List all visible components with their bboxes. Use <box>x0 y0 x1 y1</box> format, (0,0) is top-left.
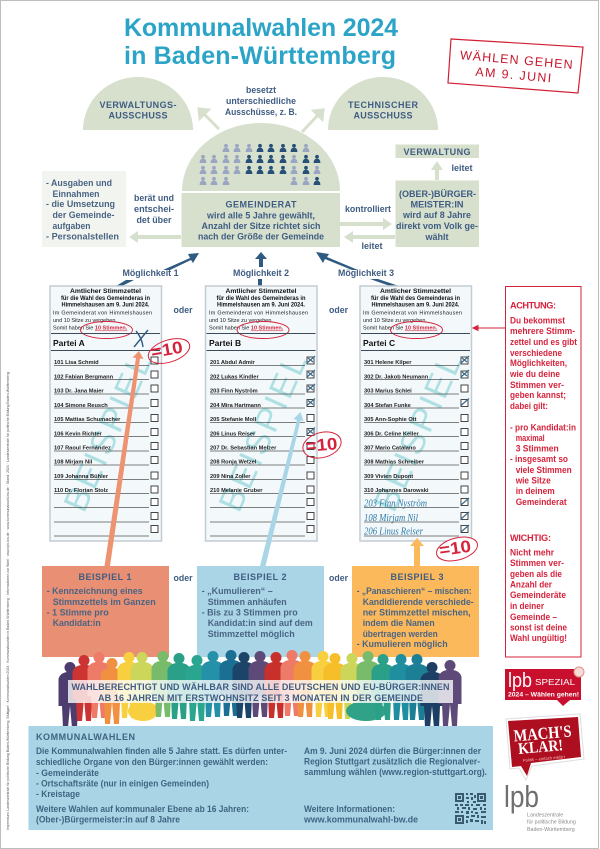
title: in Baden-Württemberg <box>124 42 396 70</box>
ballot: Partei C: Im Gemeinderat von Himmelshausen <box>363 310 462 316</box>
ballot: Partei C: 108 Mirjam Nil <box>364 513 418 524</box>
oder labels: oder <box>174 305 193 315</box>
ballot: Partei A: und 10 Sitze zu vergeben. <box>53 318 117 324</box>
dome: Verwaltungsausschuss: AUSSCHUSS <box>108 110 168 120</box>
panel: Aufgaben: - Personalstellen <box>46 232 119 242</box>
panel: Kommunalwahlen Info: Am 9. Juni 2024 dürfen die Bürger:innen der <box>304 746 481 756</box>
ballot: Partei C: für die Wahl des Gemeinderas in <box>371 295 460 302</box>
text: berät und entscheidet über: berät und <box>134 193 174 203</box>
ballot: Partei B: für die Wahl des Gemeinderas in <box>216 295 306 302</box>
ballot: Partei B: Himmelshausen am 9. Juni 2024. <box>217 302 305 308</box>
label: Möglichkeit 2: Möglichkeit 2 <box>233 268 289 278</box>
ballot: Partei C: 306 Dr. Celine Keller <box>364 432 419 438</box>
arrow: to Verwaltung <box>431 161 443 180</box>
ballot: Partei C: Partei C <box>363 338 395 348</box>
ballot: Partei B: 205 Stefanie Moll <box>210 417 257 423</box>
panel: Achtung Hinweis: ACHTUNG: <box>510 300 556 310</box>
arrow: to Verwaltungsausschuss <box>199 109 219 129</box>
text: besetzt unterschiedliche Ausschüsse: unterschiedliche <box>226 96 296 106</box>
panel: Kommunalwahlen Info <box>28 726 493 830</box>
text: besetzt unterschiedliche Ausschüsse: Ausschüsse, z. B. <box>225 107 297 117</box>
watermark: Beispiel: BEISPIEL <box>212 348 315 517</box>
panel: Achtung Hinweis: in deinem <box>516 486 555 496</box>
oder labels: oder <box>329 305 348 315</box>
panel: Kommunalwahlen Info: www.kommunalwahl-bw.de <box>303 814 418 824</box>
arrow: Möglichkeit 2 <box>255 252 267 267</box>
logo: lpb Landeszentrale: Baden-Württemberg <box>527 827 575 833</box>
panel: Achtung Hinweis: - pro Kandidat:in <box>510 422 576 432</box>
dome: Verwaltungsausschuss <box>83 77 193 130</box>
arrow: Beispiel 1 <box>104 351 144 566</box>
panel: Beispiel 2: BEISPIEL 2 <box>234 572 286 582</box>
arrow: Beispiel 2 <box>260 412 304 566</box>
panel: Bürgermeister: direkt vom Volk ge- <box>396 221 478 231</box>
logo: lpb Landeszentrale <box>504 779 576 833</box>
stamp: Wählen gehen am 9. Juni: AM 9. JUNI <box>475 65 552 85</box>
watermark: Beispiel: BEISPIEL <box>57 348 160 517</box>
panel: Beispiel 1: - 1 Stimme pro <box>47 608 109 618</box>
panel: Beispiel 3 <box>352 566 479 657</box>
arrow: leitet <box>344 231 395 243</box>
ballot: Partei A: 103 Dr. Jana Maier <box>54 388 104 394</box>
panel: Achtung Hinweis: maximal <box>516 433 545 443</box>
panel: Achtung Hinweis: Möglichkeiten, <box>510 358 567 368</box>
ballot: Partei B: und 10 Sitze zu vergeben. <box>209 318 273 324</box>
ballot: Partei A: Im Gemeinderat von Himmelshausen <box>53 310 152 316</box>
panel: Beispiel 3: indem die Namen <box>363 618 435 628</box>
logo: lpb Landeszentrale: Landeszentrale <box>527 812 563 818</box>
logo: Mach's klar: KLAR! <box>517 737 564 758</box>
panel: Gemeinderat <box>182 123 340 247</box>
arrow: Beispiel 3 <box>410 538 424 566</box>
ballot: Partei B: Amtlicher Stimmzettel <box>226 288 297 295</box>
panel: Beispiel 3: - „Panaschieren“ – mischen: <box>357 586 472 596</box>
ballot: Partei B: 210 Melanie Gruber <box>210 488 263 494</box>
logo: Mach's klar: Politik – einfach erklärt <box>523 754 566 763</box>
panel: Verwaltung <box>396 144 479 158</box>
panel: Aufgaben: der Gemeinde- <box>52 210 114 220</box>
panel: Kommunalwahlen Info: - Gemeinderäte <box>36 768 99 778</box>
callout: =10 Partei A <box>145 334 193 368</box>
logo: Mach's klar: MACH'S <box>513 722 572 746</box>
panel: Kommunalwahlen Info: - Kreistage <box>36 789 80 799</box>
panel: Gemeinderat: Anzahl der Sitze richtet sich <box>202 221 321 231</box>
logo: lpb Landeszentrale: für politische Bildung <box>527 820 576 826</box>
panel: Beispiel 1: BEISPIEL 1 <box>78 572 132 582</box>
banner: Wahlberechtigt: AB 16 JAHREN MIT ERSTWOHNSITZ SEIT 3 MONATEN IN DER GEMEINDE <box>98 693 423 703</box>
ballot: Partei A <box>50 286 162 541</box>
label: Möglichkeit 1: Möglichkeit 1 <box>122 268 178 278</box>
ballot: Partei B: Im Gemeinderat von Himmelshausen <box>209 310 308 316</box>
panel: Beispiel 2: - Bis zu 3 Stimmen pro <box>202 608 298 618</box>
ballot: Partei A: 105 Mattias Schumacher <box>54 417 121 423</box>
ballot: Partei C: 309 Vivien Dupont <box>364 474 413 480</box>
panel: Achtung Hinweis: Du bekommst <box>510 316 565 326</box>
arrow: Hinweis to ballot <box>473 326 505 330</box>
title: Kommunalwahlen 2024 <box>124 14 398 42</box>
panel: Achtung Hinweis: Gemeinderat <box>516 497 567 507</box>
ballot: Partei A: 102 Fabian Bergmann <box>54 374 114 380</box>
panel: Achtung Hinweis: geben als die <box>510 569 562 579</box>
ballot: Partei B: 209 Nina Zoller <box>210 474 251 480</box>
dome: Verwaltungsausschuss: VERWALTUNGS- <box>100 100 176 110</box>
panel: Bürgermeister: wird auf 8 Jahre <box>402 210 471 220</box>
panel: Achtung Hinweis: Anzahl der <box>510 580 552 590</box>
ballot: Partei B: 203 Finn Nyström <box>210 388 258 394</box>
ballot: Partei C: 305 Ann-Sophie Ott <box>364 417 417 423</box>
panel: Beispiel 2: Stimmzettel möglich <box>208 629 295 639</box>
panel: Kommunalwahlen Info: schiedliche Organe von den Bürger:innen gewählt werden: <box>36 757 268 767</box>
label: Möglichkeit 3: Möglichkeit 3 <box>338 268 394 278</box>
label: leitet: leitet <box>452 163 472 173</box>
ballot: Partei C: 301 Helene Kilper <box>364 360 412 366</box>
callout: =10 Partei C <box>434 533 480 565</box>
panel: Beispiel 3: ner Stimmzettel mischen, <box>363 608 471 618</box>
panel: Kommunalwahlen Info: - Ortschaftsräte (nur in einigen Gemeinden) <box>36 778 209 788</box>
panel: Achtung Hinweis: viele Stimmen <box>516 465 572 475</box>
panel: Achtung Hinweis: wie du deine <box>509 369 560 379</box>
stamp: Wählen gehen am 9. Juni <box>448 39 583 93</box>
ballot: Partei A: 110 Dr. Florian Stolz <box>54 488 108 494</box>
logo: lpb Spezial <box>505 667 584 706</box>
panel: Achtung Hinweis: zettel und es gibt <box>510 337 577 347</box>
people silhouettes <box>58 650 462 728</box>
panel: Aufgaben: - Ausgaben und <box>46 178 112 188</box>
panel: Achtung Hinweis: verschiedene <box>510 348 562 358</box>
oder labels: oder <box>329 573 348 583</box>
ballot: Partei A: Somit haben Sie 10 Stimmen. <box>53 326 128 332</box>
ballot: Partei B: 201 Abdul Admir <box>210 360 256 366</box>
panel: Beispiel 3: Kandidierende verschiede- <box>363 597 474 607</box>
panel: Beispiel 3: - Kumulieren möglich <box>357 639 448 649</box>
ballot: Partei C: 303 Marius Schlei <box>364 388 412 394</box>
connectors to ballots <box>116 279 399 286</box>
panel: Bürgermeister <box>396 180 479 247</box>
title <box>124 14 398 70</box>
ballot: Partei A: 104 Simone Reusch <box>54 403 108 409</box>
panel: Aufgaben: Einnahmen <box>52 189 100 199</box>
callout: =10 Partei B <box>300 428 344 462</box>
panel: Gemeinderat: GEMEINDERAT <box>226 200 297 210</box>
panel: Achtung Hinweis: Stimmen ver- <box>510 380 564 390</box>
panel: Achtung Hinweis: - insgesamt so <box>510 454 568 464</box>
dome: Technischer Ausschuss <box>328 77 438 130</box>
panel: Beispiel 2 <box>197 566 324 657</box>
text: berät und entscheidet über <box>134 193 174 225</box>
banner: Wahlberechtigt <box>68 680 453 703</box>
panel: Achtung Hinweis: Gemeinde – <box>510 612 557 622</box>
ballot: Partei A: Partei A <box>53 338 85 348</box>
panel: Achtung Hinweis: dabei gilt: <box>510 401 548 411</box>
panel: Achtung Hinweis: Stimmen ver- <box>510 558 564 568</box>
panel: Bürgermeister: wählt <box>425 232 448 242</box>
oder labels: oder <box>174 573 193 583</box>
panel: Beispiel 3: BEISPIEL 3 <box>390 572 444 582</box>
QR code <box>455 793 486 824</box>
banner: Wahlberechtigt: WAHLBERECHTIGT UND WÄHLBAR SIND ALLE DEUTSCHEN UND EU-BÜRGER:INNEN <box>72 682 450 692</box>
seat icons <box>200 144 320 185</box>
ballot: Partei C: 203 Finn Nyström <box>364 498 427 510</box>
ballot: Partei C <box>360 286 472 541</box>
panel: Achtung Hinweis <box>506 286 581 657</box>
ballot: Partei C: Amtlicher Stimmzettel <box>380 288 451 295</box>
ballot: Partei A: 108 Mirjam Nil <box>54 460 93 466</box>
ballot: Partei C: 206 Linus Reiser <box>364 526 423 538</box>
ballot: Partei B: 202 Lukas Kindler <box>210 374 259 380</box>
panel: Beispiel 1: Stimmzettels im Ganzen <box>53 597 156 607</box>
panel: Kommunalwahlen Info: KOMMUNALWAHLEN <box>36 732 135 742</box>
ballot: Partei C: 307 Mario Catalano <box>364 446 416 452</box>
panel: Achtung Hinweis: Wahl ungültig! <box>510 633 567 643</box>
panel: Aufgaben: - die Umsetzung <box>46 199 115 209</box>
arrow: Möglichkeit 1 <box>163 253 199 270</box>
panel: Beispiel 2: - „Kumulieren“ – <box>202 586 273 596</box>
panel: Kommunalwahlen Info: Weitere Wahlen auf kommunaler Ebene ab 16 Jahren: <box>36 804 249 814</box>
text: besetzt unterschiedliche Ausschüsse: besetzt <box>246 85 276 95</box>
oder labels <box>174 305 348 583</box>
text: besetzt unterschiedliche Ausschüsse <box>225 85 297 117</box>
watermark: Beispiel: BEISPIEL <box>367 348 470 517</box>
ballot: Partei A: für die Wahl des Gemeinderas in <box>61 295 150 302</box>
text: berät und entscheidet über: entschei- <box>134 204 174 214</box>
callout: =10 Partei C: =10 <box>438 537 472 560</box>
panel: Beispiel 3: übertragen werden <box>363 629 438 639</box>
ballot: Partei B: 208 Ronja Wetzel <box>210 460 257 466</box>
panel: Achtung Hinweis: geben kannst; <box>510 390 566 400</box>
ballot: Partei C: 302 Dr. Jakob Neumann <box>364 374 429 380</box>
ballot: Partei A: Himmelshausen am 9. Juni 2024. <box>62 302 150 308</box>
panel: Verwaltung: VERWALTUNG <box>404 147 470 157</box>
arrow: kontrolliert <box>340 218 392 230</box>
label: kontrolliert: kontrolliert <box>345 204 391 214</box>
panel: Bürgermeister: MEISTER:IN <box>410 200 464 210</box>
panel: Beispiel 2: Stimmen anhäufen <box>208 597 287 607</box>
panel: Achtung Hinweis: wie Sitze <box>515 476 551 486</box>
logo: lpb Spezial: SPEZIAL <box>535 678 576 687</box>
ballot: Partei B <box>206 286 317 541</box>
ballot: Partei C: 308 Mathias Schreiber <box>364 460 425 466</box>
ballot: Partei C: 310 Johannes Darowski <box>364 488 429 494</box>
panel: Achtung Hinweis: Nicht mehr <box>510 548 554 558</box>
ballot: Partei A: 107 Raoul Fernández <box>54 446 111 452</box>
ballot: Partei C: Somit haben Sie 10 Stimmen. <box>363 326 438 332</box>
panel: Achtung Hinweis: mehrere Stimm- <box>510 326 575 336</box>
dome: Technischer Ausschuss: TECHNISCHER <box>348 100 418 110</box>
panel: Kommunalwahlen Info: Region Stuttgart zusätzlich die Regionalver- <box>304 756 480 766</box>
ballot: Partei C: 304 Stefan Funke <box>364 403 411 409</box>
panel: Kommunalwahlen Info: Weitere Informationen: <box>304 804 395 814</box>
panel: Beispiel 1: - Kennzeichnung eines <box>47 586 143 596</box>
ballot: Partei B: Somit haben Sie 10 Stimmen. <box>209 326 284 332</box>
text: berät und entscheidet über: det über <box>136 215 172 225</box>
logo: Mach's klar <box>506 714 584 780</box>
panel: Gemeinderat: nach der Größe der Gemeinde <box>198 232 324 242</box>
logo: lpb Spezial: 2024 – Wählen gehen! <box>508 692 579 698</box>
panel: Achtung Hinweis: 3 Stimmen <box>516 444 559 454</box>
panel: Bürgermeister: (OBER-)BÜRGER- <box>399 189 476 199</box>
ballot: Partei A: 106 Kevin Richter <box>54 432 103 438</box>
ballot: Partei B: Partei B <box>209 338 241 348</box>
panel: Beispiel 1 <box>42 566 169 657</box>
panel: Achtung Hinweis: in deiner <box>510 601 544 611</box>
ballot: Partei A: 101 Lisa Schmid <box>54 360 99 366</box>
ballot: Partei B: 204 Mira Hartmann <box>210 403 261 409</box>
panel: Achtung Hinweis: WICHTIG: <box>510 533 551 543</box>
panel: Aufgaben: aufgaben <box>52 221 91 231</box>
ballot: Partei B: 207 Dr. Sebastian Melzer <box>210 446 277 452</box>
arrow: Möglichkeit 3 <box>316 252 358 270</box>
stamp: Wählen gehen am 9. Juni: WÄHLEN GEHEN <box>459 48 573 72</box>
dome: Technischer Ausschuss: AUSSCHUSS <box>354 110 412 120</box>
panel: Gemeinderat: wird alle 5 Jahre gewählt, <box>206 210 315 220</box>
ballot: Partei C: und 10 Sitze zu vergeben. <box>363 318 427 324</box>
panel: Kommunalwahlen Info: sammlung wählen (www.region-stuttgart.org). <box>304 767 487 777</box>
ballot: Partei A: 109 Johanna Bühler <box>54 474 109 480</box>
callout: =10 Partei A: =10 <box>149 338 184 362</box>
panel: Kommunalwahlen Info: (Ober-)Bürgermeister:in auf 8 Jahre <box>36 814 180 824</box>
logo: lpb Landeszentrale: lpb <box>504 779 539 814</box>
panel: Achtung Hinweis: Gemeinderäte <box>510 590 566 600</box>
panel: Beispiel 2: Kandidat:in sind auf dem <box>208 618 313 628</box>
label: leitet: leitet <box>362 241 382 251</box>
panel: Beispiel 1: Kandidat:in <box>53 618 101 628</box>
panel: Achtung Hinweis: sonst ist deine <box>510 622 567 632</box>
ballot: Partei B: 206 Linus Reiser <box>210 432 256 438</box>
panel: Aufgaben <box>42 171 126 247</box>
panel: Kommunalwahlen Info: Die Kommunalwahlen finden alle 5 Jahre statt. Es dürfen unter- <box>36 746 287 756</box>
arrow: to Aufgaben <box>129 231 181 243</box>
logo: lpb Spezial: lpb <box>508 670 532 692</box>
ballot: Partei A: Amtlicher Stimmzettel <box>70 288 141 295</box>
ballot: Partei C: Himmelshausen am 9. Juni 2024. <box>372 302 460 308</box>
imprint: vertical small print: Impressum: Landeszentrale für politische Bildung Baden-Württemberg, Stuttgart · Kommunalwahlen 2024 · Kommunalwahlen in Baden-Württemberg · Informationen zur Wahl · www.lpb-bw.de · www.kommunalwahl-bw.de · Stand: 2024 · Landeszentrale für politische Bildung Baden-Württemberg <box>6 372 10 830</box>
callout: =10 Partei B: =10 <box>305 434 338 456</box>
arrow: to Technischer Ausschuss <box>302 110 323 132</box>
